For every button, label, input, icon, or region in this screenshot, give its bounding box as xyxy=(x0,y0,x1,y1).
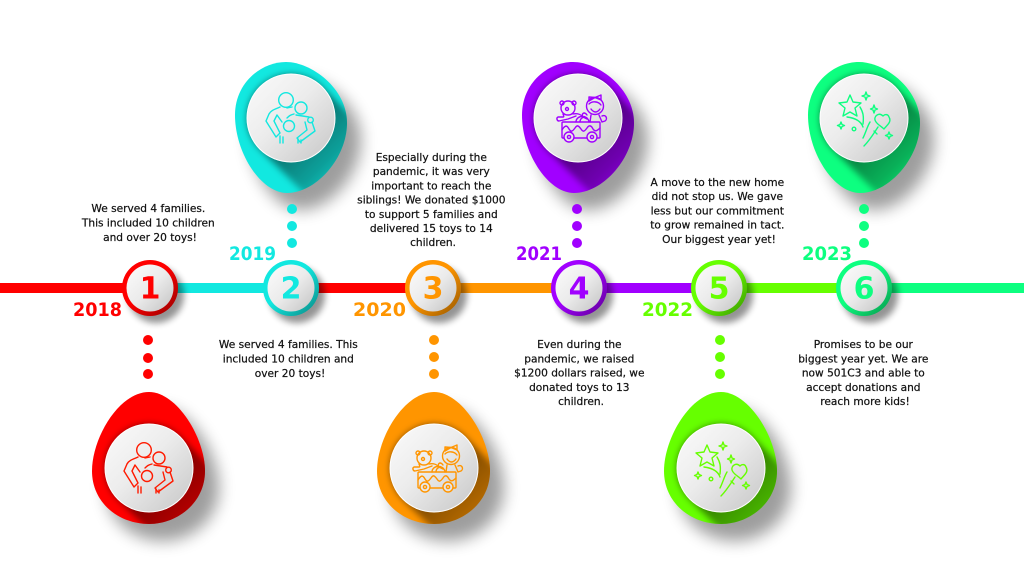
description 2020: Especially during the xyxy=(376,152,487,164)
milestone 4: 2021 xyxy=(514,62,648,408)
description 2019: We served 4 families. This xyxy=(219,339,358,351)
description 2023: reach more kids! xyxy=(820,396,910,408)
milestone 3: 2020 xyxy=(353,152,509,541)
year 2021: 2021 xyxy=(516,244,562,265)
description 2018: This included 10 children xyxy=(81,218,215,230)
description 2020: pandemic, it was very xyxy=(373,166,490,178)
number marker 3: 3 xyxy=(423,272,443,306)
description 2020: siblings! We donated $1000 xyxy=(357,195,506,207)
description 2022: Our biggest year yet! xyxy=(662,234,776,246)
year 2023: 2023 xyxy=(802,244,852,265)
number marker 2 xyxy=(263,260,325,323)
description 2023: accept donations and xyxy=(806,382,921,394)
connector dots xyxy=(429,335,439,379)
pin: family icon teal xyxy=(235,62,361,210)
description 2022: did not stop us. We gave xyxy=(652,191,783,203)
description 2020: delivered 15 toys to 14 xyxy=(370,223,493,235)
number marker 4: 4 xyxy=(569,272,589,306)
year 2018: 2018 xyxy=(73,300,122,321)
description 2018: We served 4 families. xyxy=(91,203,205,215)
description 2021: children. xyxy=(558,396,604,408)
number marker 4 xyxy=(551,260,613,323)
description 2023: now 501C3 and able to xyxy=(802,368,925,380)
number marker 3 xyxy=(405,260,467,323)
description 2019: over 20 toys! xyxy=(255,368,325,380)
pin: toys icon purple xyxy=(522,62,648,210)
milestone 6: 2023 xyxy=(798,62,934,408)
pin: family icon red xyxy=(92,392,219,541)
year 2020: 2020 xyxy=(353,300,406,321)
connector dots xyxy=(572,204,582,248)
description 2020: children. xyxy=(410,237,456,249)
description 2023: biggest year yet. We are xyxy=(798,353,928,365)
description 2019: included 10 children and xyxy=(223,354,354,366)
description 2020: important to reach the xyxy=(371,180,491,192)
description 2022: to grow remained in tact. xyxy=(650,220,784,232)
connector dots xyxy=(859,204,869,248)
description 2021: $1200 dollars raised, we xyxy=(514,368,644,380)
pin: toys icon orange xyxy=(377,392,504,541)
milestone 2: 2019 xyxy=(219,62,361,380)
connector dots xyxy=(715,335,725,379)
timeline bar xyxy=(0,283,1024,293)
milestone 1: 2018 xyxy=(73,203,219,541)
number marker 5 xyxy=(691,260,753,323)
number marker 1 xyxy=(122,260,184,323)
number marker 2: 2 xyxy=(281,272,301,306)
pin: fireworks icon lime xyxy=(664,392,791,541)
milestone 5: 2022 xyxy=(642,177,791,541)
year 2022: 2022 xyxy=(642,300,693,321)
year 2019: 2019 xyxy=(229,244,276,265)
number marker 6 xyxy=(836,260,898,323)
description 2022: less but our commitment xyxy=(651,205,784,217)
number marker 1: 1 xyxy=(140,272,160,306)
connector dots xyxy=(287,204,297,248)
pin: fireworks icon green xyxy=(808,62,934,210)
description 2021: Even during the xyxy=(537,339,622,351)
number marker 5: 5 xyxy=(709,272,729,306)
description 2018: and over 20 toys! xyxy=(103,232,197,244)
description 2022: A move to the new home xyxy=(650,177,784,189)
description 2020: to support 5 families and xyxy=(365,209,498,221)
description 2021: pandemic, we raised xyxy=(524,353,634,365)
description 2021: donated toys to 13 xyxy=(529,382,630,394)
number marker 6: 6 xyxy=(854,272,874,306)
connector dots xyxy=(143,335,153,379)
description 2023: Promises to be our xyxy=(814,339,914,351)
